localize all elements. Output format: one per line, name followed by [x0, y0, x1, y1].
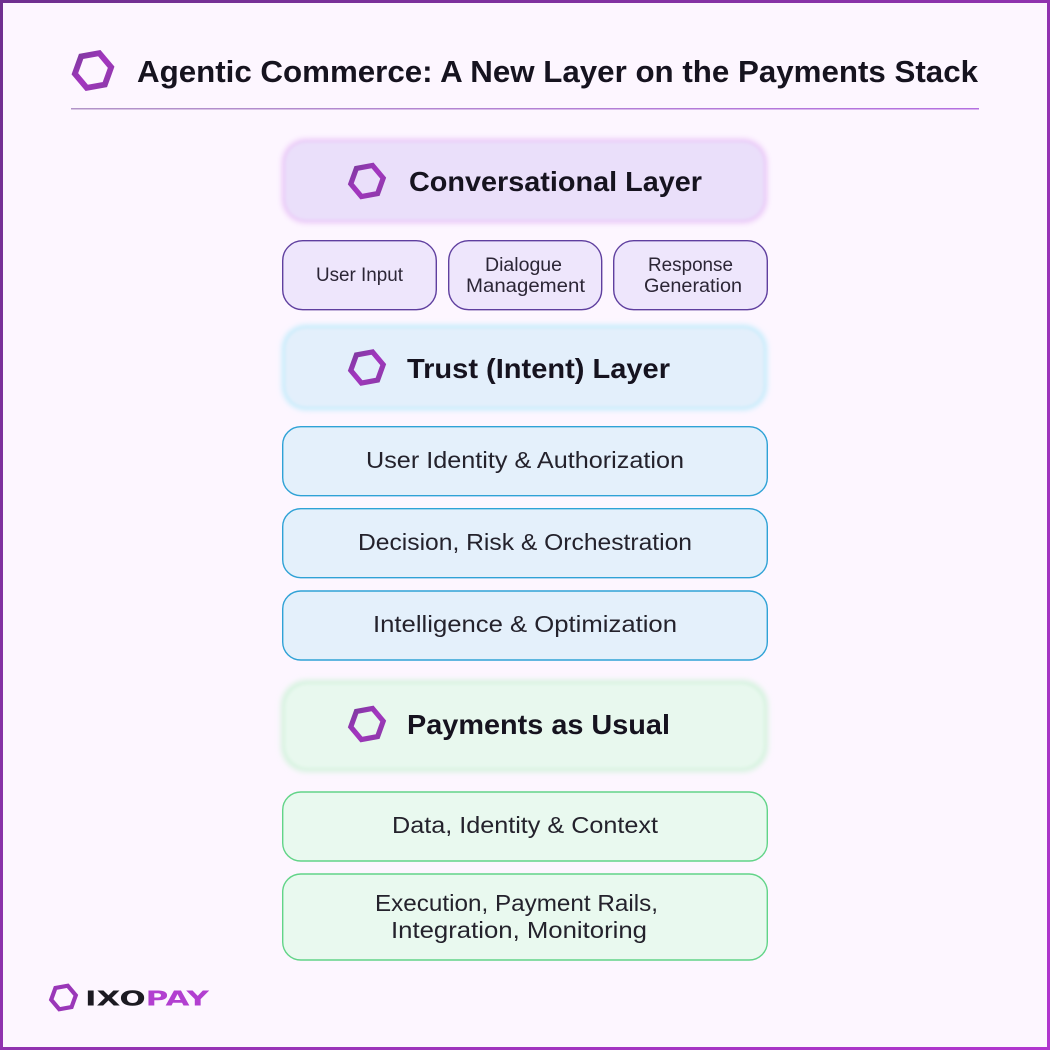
- box: user identity: User Identity & Authorization: [366, 447, 684, 473]
- panel: trust layer: [282, 325, 767, 660]
- box: user input: [283, 241, 436, 310]
- panel: payments as usual: [281, 680, 768, 960]
- box: execution: Integration, Monitoring: [391, 917, 647, 943]
- icon: payments hexagon: [351, 708, 383, 740]
- title: Agentic Commerce: A New Layer on the Payments Stack: [137, 54, 979, 89]
- heading: trust layer: Trust (Intent) Layer: [407, 353, 670, 384]
- box: data identity: Data, Identity & Context: [392, 812, 659, 838]
- box: execution: Execution, Payment Rails,: [375, 890, 658, 916]
- box: user input: User Input: [316, 265, 404, 286]
- box: intelligence: Intelligence & Optimization: [373, 611, 677, 637]
- panel: conversational layer: [282, 139, 767, 310]
- logo wordmark: IXO PAY: [85, 986, 210, 1010]
- conversational layer header: [282, 139, 767, 223]
- box: response generation: Generation: [644, 276, 742, 297]
- logo: IXOPAY: [51, 986, 210, 1010]
- box: response generation: Response: [648, 255, 733, 276]
- box: decision risk: Decision, Risk & Orchestration: [358, 529, 692, 555]
- icon: conversational hexagon: [351, 166, 383, 196]
- icon: title hexagon: [75, 53, 111, 88]
- box: decision risk: [283, 509, 767, 578]
- icon: logo hexagon: [51, 986, 76, 1009]
- heading: conversational layer: Conversational Layer: [409, 166, 702, 197]
- box: user identity: [283, 427, 767, 496]
- payments header: [281, 680, 768, 772]
- box: intelligence: [283, 591, 767, 660]
- box: dialogue management: [449, 241, 602, 310]
- box: execution: [283, 874, 767, 960]
- box: data identity: [283, 792, 767, 861]
- trust layer header: [282, 325, 767, 410]
- box: response generation: [614, 241, 767, 310]
- box: dialogue management: Dialogue: [485, 255, 562, 276]
- header: icon, title and rule: [71, 53, 979, 110]
- box: dialogue management: Management: [466, 276, 586, 297]
- icon: trust hexagon: [351, 352, 383, 383]
- heading: payments as usual: Payments as Usual: [407, 709, 670, 740]
